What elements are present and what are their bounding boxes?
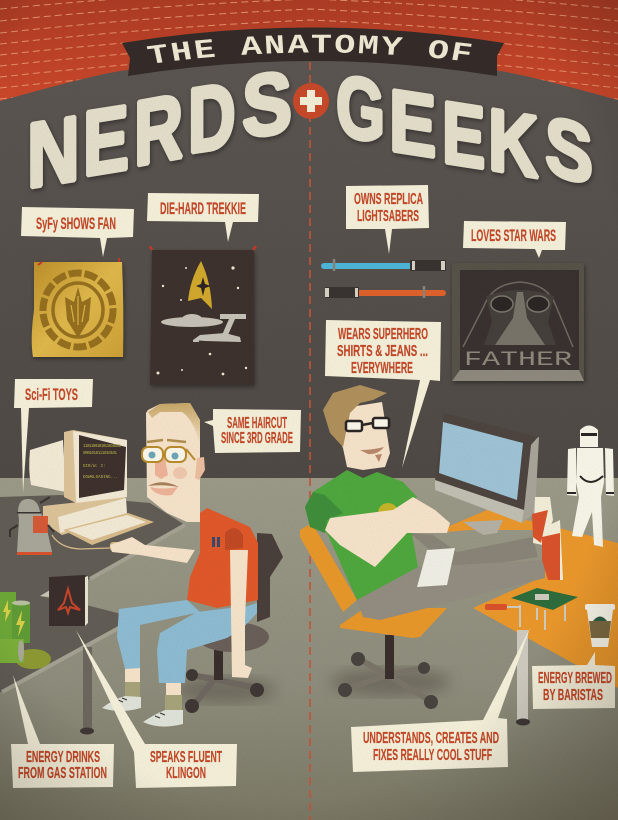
heading: geeks: S [545,97,593,203]
icon: circuit board [511,588,578,630]
callout: energy drinks: ENERGY DRINKS [26,749,100,766]
icon: energy drink cans [0,592,51,669]
geek chair [300,523,450,709]
sleeve [305,492,343,533]
poster: darth vader father [452,263,584,381]
icon: coffee cup [585,604,615,647]
heading: nerds [27,54,292,208]
lower sneaker [545,520,563,580]
icon: mouse and cord [52,535,132,551]
callout: wears superhero shirts [325,320,441,468]
heading: the anatomy of: THE ANATOMY OF [146,34,472,63]
heading: geeks: G [336,57,385,163]
callout: energy drinks [11,675,114,788]
hair [323,385,387,447]
icon: klingon book [49,575,88,626]
title banner [122,28,504,76]
upper sneaker [533,497,553,545]
callout: syfy shows fan [21,207,134,257]
center dashed divider [309,62,311,820]
heading: nerds: N [27,96,80,208]
icon: blue lightsaber [321,259,446,271]
desk leg [83,647,92,731]
floor [0,478,618,820]
nose [155,453,168,479]
legs and jeans [102,600,257,727]
heading: nerds: E [83,86,129,196]
callout: sci-fi toys [14,379,93,493]
icon: robot toy [10,497,54,555]
poster: battlestar galactica [32,258,123,357]
callout: speaks fluent klingon: SPEAKS FLUENT [150,749,222,766]
nerd chair [175,533,283,713]
callout: speaks fluent klingon [76,630,237,788]
sleeve [225,528,243,550]
callout: understands creates fixes [351,628,530,772]
callout: understands creates fixes: UNDERSTANDS, CREATES AND [363,730,499,747]
heading: geeks [336,57,593,203]
icon: screwdriver [485,604,521,610]
eyes [148,452,178,460]
heading: nerds: R [134,74,183,186]
icon: retro computer [29,430,154,545]
callout: die-hard trekkie [147,193,259,242]
desk foot [80,728,94,734]
callout: owns replica lightsabers: LIGHTSABERS [357,208,419,225]
icon: imac monitor [435,413,539,535]
callout: wears superhero shirts: EVERYWHERE [351,360,413,377]
poster: star trek [150,246,256,385]
heading: nerds: S [242,54,292,156]
icon: starfleet delta [188,261,212,309]
callout: syfy shows fan: SyFy SHOWS FAN [36,214,116,233]
geek figure [305,385,563,620]
callout: energy drinks: FROM GAS STATION [18,765,107,782]
wall [0,58,618,480]
geek desk leg [516,630,530,726]
icon: starship enterprise [161,314,246,342]
ear [195,457,205,480]
callout: speaks fluent klingon: KLINGON [166,765,206,782]
icon: stormtrooper figure [567,426,614,547]
heading: geeks: E [389,71,436,177]
orange shirt [187,508,258,608]
icon: retro computer: DOWNLOADING... [83,476,118,480]
heading: geeks: E [442,84,485,188]
plus badge [293,83,329,119]
red top band with stitching [0,0,618,110]
lower leg [357,560,545,620]
callout: same haircut: SAME HAIRCUT [227,415,287,432]
upper leg [410,533,538,570]
hair [148,403,200,445]
nerd figure [102,403,258,727]
heading: geeks: K [488,90,539,197]
callout: owns replica lightsabers [346,185,429,254]
keyboard [417,548,455,587]
glasses [142,447,195,462]
reaching arm [110,537,201,563]
eyebrows [147,440,186,442]
callout: wears superhero shirts: WEARS SUPERHERO [338,326,428,343]
crossed arms [325,497,450,567]
nerd desk [0,495,185,731]
icon: orange lightsaber [325,286,446,298]
icon: retro computer: DIR/W: C: [83,464,106,469]
callout: sci-fi toys: Sci-Fi TOYS [25,385,78,404]
callout: same haircut [204,409,301,453]
icon: vader helmet [463,282,573,347]
pocket pens [212,537,220,547]
callout: understands creates fixes: FIXES REALLY COOL STUFF [373,747,492,764]
green shirt [305,470,418,600]
cheek [173,467,187,479]
icon: retro computer: 0001010111010101 [83,452,117,456]
keyboard [63,513,154,545]
heading: nerds: D [188,63,236,174]
hanging arm [230,550,252,678]
mustache and mouth [148,482,179,495]
shirt logo [378,503,398,523]
glasses [346,418,389,431]
callout: same haircut: SINCE 3RD GRADE [221,430,293,447]
head [146,403,200,522]
icon: retro computer: 1101100101011010101 [83,445,121,449]
face [335,402,390,470]
callout: wears superhero shirts: SHIRTS & JEANS ... [337,343,428,360]
keyboard keys [68,515,146,540]
callout: energy brewed by baristas [532,652,615,709]
mouth and goatee [360,447,384,462]
geek desk [433,510,618,688]
text: father: FATHER [464,349,572,372]
callout: die-hard trekkie: DIE-HARD TREKKIE [160,199,246,218]
callout: loves star wars [463,221,566,258]
callout: owns replica lightsabers: OWNS REPLICA [354,191,423,208]
